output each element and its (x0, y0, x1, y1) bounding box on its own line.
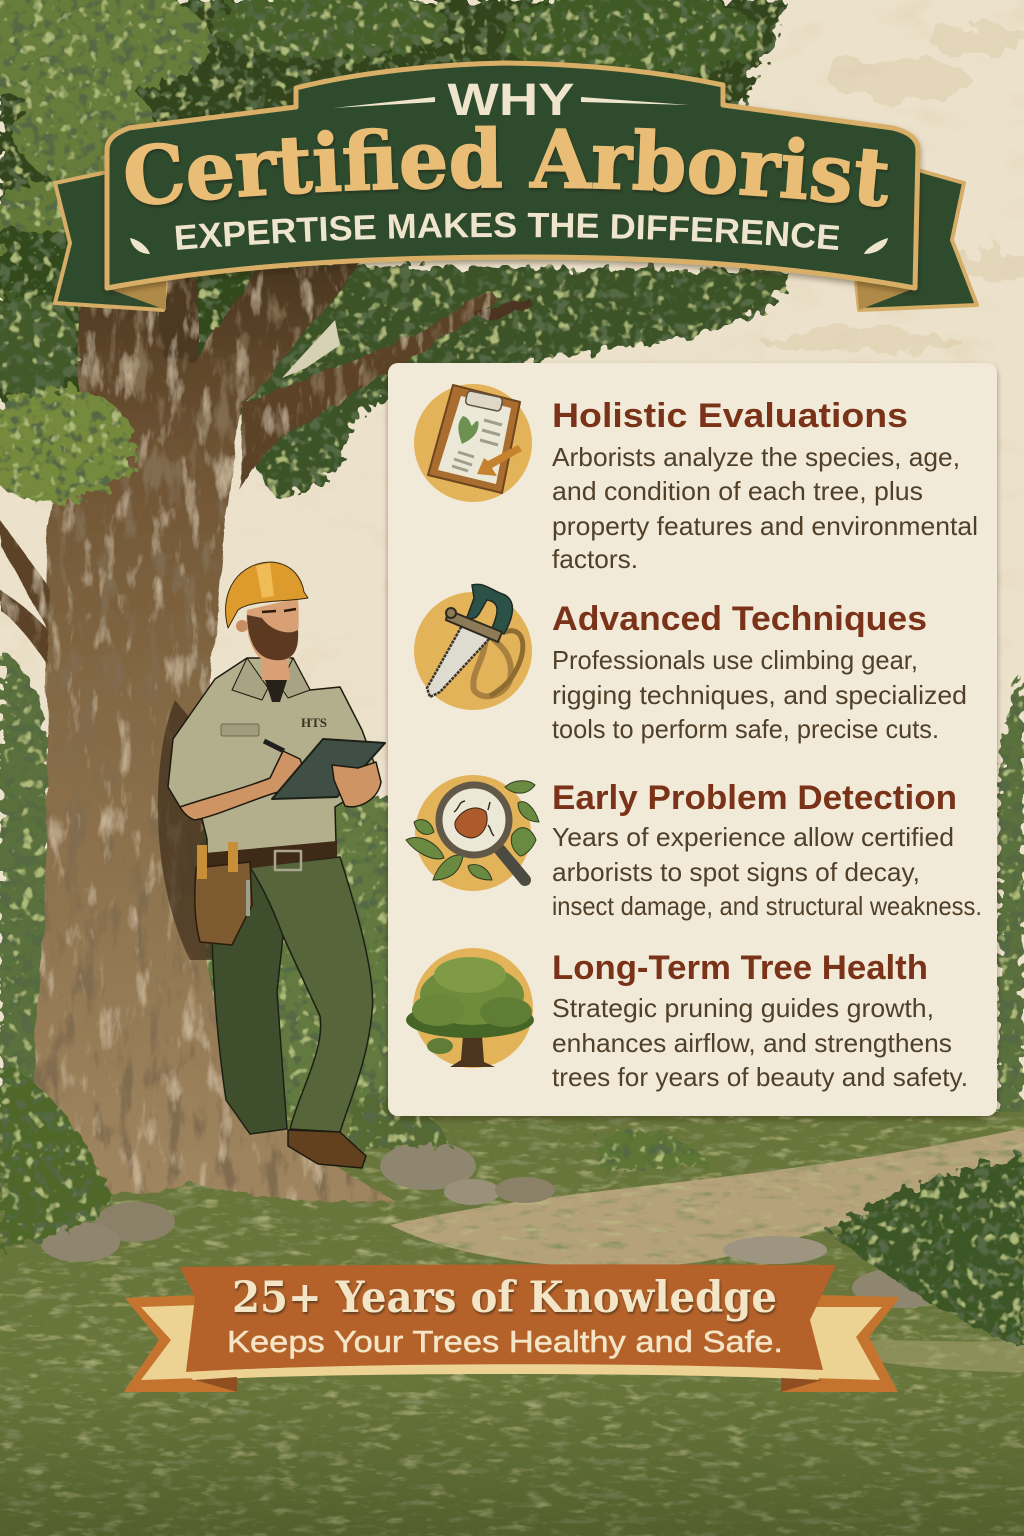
WHY label (333, 74, 689, 125)
icon: chainsaw and rope (414, 584, 532, 710)
pen (264, 741, 284, 751)
body text (552, 822, 982, 921)
icon: magnifier and beetle (406, 775, 539, 891)
body text: Professionals use climbing gear, (552, 645, 918, 675)
body text: arborists to spot signs of decay, (552, 857, 920, 887)
body text: insect damage, and structural weakness. (552, 891, 982, 921)
body text (552, 645, 967, 744)
body text (552, 442, 978, 574)
body text (552, 993, 968, 1092)
tree canopy foliage (0, 0, 787, 497)
banner tails (55, 170, 977, 310)
body text: rigging techniques, and specialized (552, 680, 967, 710)
arborist figure (158, 562, 385, 1168)
WHY label: WHY (448, 74, 574, 125)
heading: Early Problem Detection (552, 779, 957, 817)
body text: Years of experience allow certified (552, 822, 954, 852)
ribbon headline: 25+ Years of Knowledge (232, 1273, 777, 1323)
tool pouch (195, 842, 252, 945)
item: long-term tree health (406, 948, 968, 1092)
heading: Advanced Techniques (552, 600, 927, 638)
item: early problem detection (406, 775, 982, 921)
right hand (332, 762, 381, 807)
body text: tools to perform safe, precise cuts. (552, 714, 939, 744)
ribbon body (180, 1264, 836, 1372)
tree trunk and branches (35, 262, 532, 1202)
body text: enhances airflow, and strengthens (552, 1028, 952, 1058)
leaf ornaments (130, 238, 888, 254)
body text: and condition of each tree, plus (552, 476, 923, 506)
branches at left edge (0, 520, 50, 665)
legs (212, 857, 373, 1134)
ribbon tails (124, 1295, 900, 1392)
banner body (107, 63, 918, 288)
distant bushes (0, 650, 1024, 1130)
main title: Certified Arborist (126, 126, 890, 210)
left arm (180, 751, 302, 820)
ground with path (0, 1112, 1024, 1536)
ribbon subline: Keeps Your Trees Healthy and Safe. (227, 1324, 783, 1359)
body text: factors. (552, 544, 638, 574)
belt (205, 841, 337, 872)
body text: property features and environmental (552, 511, 978, 541)
heading: Long-Term Tree Health (552, 949, 928, 987)
title banner (53, 60, 979, 312)
body text: Arborists analyze the species, age, (552, 442, 960, 472)
subtitle: EXPERTISE MAKES THE DIFFERENCE (176, 212, 839, 250)
item: holistic evaluations (414, 384, 978, 574)
icon: clipboard (414, 384, 532, 502)
shadow on trunk (158, 700, 225, 960)
bottom ribbon banner (124, 1264, 900, 1392)
boot (288, 1130, 366, 1168)
item: advanced techniques (414, 584, 967, 744)
clipboard (272, 739, 385, 799)
info panel (388, 363, 997, 1116)
body text: Strategic pruning guides growth, (552, 993, 934, 1023)
sky gap between limbs (282, 320, 340, 378)
heading: Holistic Evaluations (552, 397, 908, 435)
icon: tree (406, 948, 534, 1068)
rocks and shrubs along the base (0, 1060, 1024, 1345)
left foliage clump (0, 295, 135, 503)
shirt (168, 658, 380, 855)
head (247, 598, 299, 680)
body text: trees for years of beauty and safety. (552, 1062, 968, 1092)
HTS label: HTS (301, 715, 327, 730)
hard hat (226, 562, 308, 628)
